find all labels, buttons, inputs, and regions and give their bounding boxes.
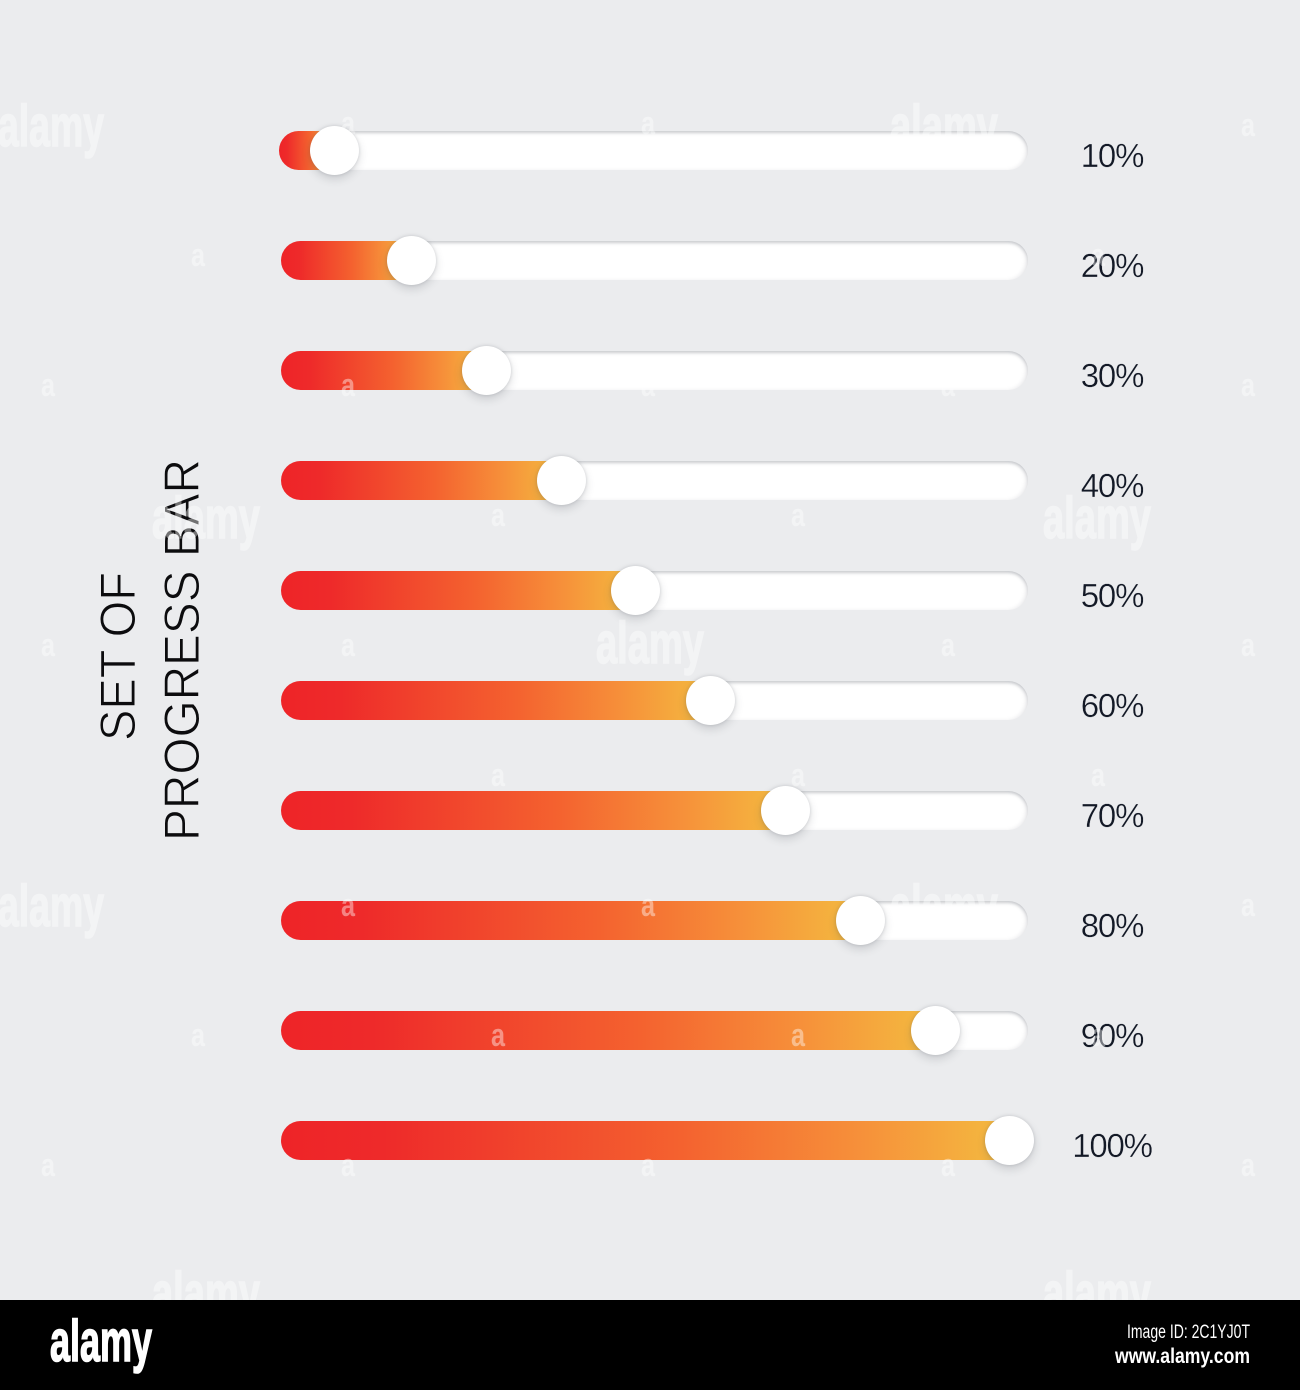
progress bar row: 20% — [281, 234, 1144, 292]
progress bar row: 20%: 20% — [1081, 247, 1143, 284]
watermark overlay: a — [341, 105, 355, 141]
progress bar row: 70% — [281, 784, 1144, 842]
progress bar row: 100% — [281, 1114, 1152, 1172]
progress bar row: 60% — [281, 674, 1144, 732]
progress bar row: 60%: 60% — [1081, 687, 1143, 724]
progress bar row: 70%: 70% — [1081, 797, 1143, 834]
watermark overlay: a — [941, 367, 955, 403]
watermark overlay: a — [191, 237, 205, 273]
watermark overlay: a — [1241, 887, 1255, 923]
watermark overlay: a — [1241, 367, 1255, 403]
progress bar row: 10% — [279, 124, 1144, 182]
watermark overlay: a — [341, 627, 355, 663]
watermark overlay: a — [941, 627, 955, 663]
watermark overlay: a — [341, 887, 355, 923]
watermark overlay: a — [41, 627, 55, 663]
progress bar row: 90%: 90% — [1081, 1017, 1143, 1054]
progress bar row: 100%: 100% — [1072, 1127, 1152, 1164]
progress bar row: 10%: 10% — [1081, 137, 1143, 174]
progress bar row: 30%: 30% — [1081, 357, 1143, 394]
watermark overlay: a — [1241, 107, 1255, 143]
watermark overlay: a — [41, 1147, 55, 1183]
watermark overlay: a — [1241, 627, 1255, 663]
watermark overlay: a — [191, 1017, 205, 1053]
watermark overlay: a — [491, 1017, 505, 1053]
watermark overlay: alamy — [0, 94, 104, 159]
title: set of progress bar: PROGRESS BAR — [154, 459, 210, 841]
progress bar row: 90% — [281, 1004, 1144, 1062]
watermark overlay: a — [1091, 757, 1105, 793]
watermark overlay: a — [641, 887, 655, 923]
watermark overlay: alamy — [1043, 486, 1151, 551]
watermark overlay: alamy — [890, 94, 998, 159]
watermark overlay: a — [641, 105, 655, 141]
watermark overlay: alamy — [890, 874, 998, 939]
progress bar row: 50%: 50% — [1081, 577, 1143, 614]
image id: Image ID: 2C1YJ0T — [1127, 1322, 1250, 1343]
watermark overlay: a — [941, 1147, 955, 1183]
progress bar row: 80%: 80% — [1081, 907, 1143, 944]
watermark overlay: a — [341, 367, 355, 403]
title: set of progress bar: SET OF — [90, 572, 146, 741]
alamy logo: alamy — [50, 1309, 152, 1374]
watermark overlay: a — [791, 237, 805, 273]
watermark overlay: a — [491, 757, 505, 793]
watermark overlay: a — [491, 497, 505, 533]
watermark overlay: a — [1091, 1017, 1105, 1053]
watermark overlay: a — [791, 1017, 805, 1053]
progress bar row: 50% — [281, 564, 1144, 622]
watermark overlay: a — [1091, 237, 1105, 273]
watermark overlay: a — [641, 1147, 655, 1183]
watermark overlay: a — [791, 757, 805, 793]
progress bar row: 30% — [281, 344, 1144, 402]
watermark overlay: a — [641, 367, 655, 403]
watermark overlay: alamy — [152, 486, 260, 551]
progress bar row: 80% — [281, 894, 1144, 952]
watermark overlay: a — [41, 367, 55, 403]
title: set of progress bar — [90, 459, 210, 841]
watermark overlay: a — [491, 237, 505, 273]
website: www.alamy.com — [1114, 1345, 1250, 1368]
progress bar row: 40%: 40% — [1081, 467, 1143, 504]
watermark overlay: alamy — [0, 874, 104, 939]
watermark overlay: alamy — [596, 611, 704, 676]
footer band — [0, 1300, 1300, 1390]
progress bar row: 40% — [281, 454, 1144, 512]
watermark overlay: a — [341, 1147, 355, 1183]
watermark overlay: a — [791, 497, 805, 533]
watermark overlay: a — [1241, 1147, 1255, 1183]
